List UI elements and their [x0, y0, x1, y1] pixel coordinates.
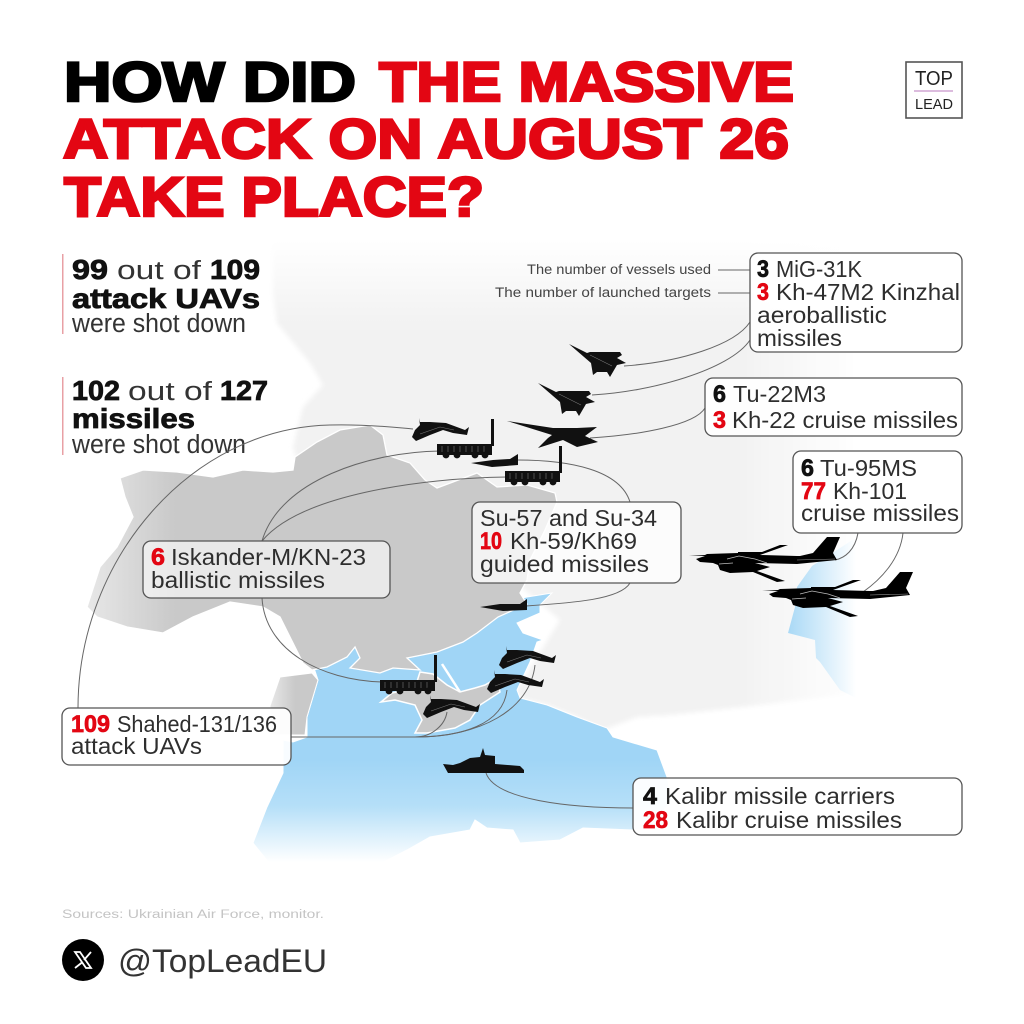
callout: MiG-31K: 3 [757, 279, 769, 306]
icon: Shahed drone north [412, 418, 469, 441]
callout: MiG-31K: missiles [757, 325, 842, 351]
icon: Su fighter north [471, 454, 518, 467]
logo: Top Lead: LEAD [915, 96, 953, 113]
icon: Tu-95MS bomber second [762, 572, 913, 617]
callout: Su-57 and Su-34: 10 [480, 528, 502, 555]
stat: attack UAVs shot down: were shot down [71, 310, 246, 338]
icon: Kalibr missile ship [443, 748, 524, 773]
legend labels: The number of vessels used [527, 262, 711, 277]
callout: Tu-22M3: Tu-22M3 [733, 381, 826, 407]
icon: X logo [62, 939, 104, 981]
map background [87, 236, 900, 864]
Crimea [381, 672, 500, 733]
icon: Iskander launcher Crimea [380, 655, 437, 694]
stat: missiles shot down: 127 [220, 375, 268, 406]
icon: MiG-31K aircraft second [538, 383, 595, 416]
callout: Tu-95MS: Tu-95MS [820, 455, 917, 481]
callout: Kalibr: Kalibr missile carriers [665, 783, 895, 809]
callout: Su-57 and Su-34: Kh-59/Kh69 [510, 528, 637, 554]
top fade [260, 236, 900, 326]
callout: Shahed-131/136 [62, 708, 291, 765]
icon: Shahed drone Crimea [423, 695, 480, 718]
callout: MiG-31K: aeroballistic [757, 302, 887, 328]
callout: Kalibr: 4 [643, 783, 658, 810]
icon: Shahed drone Kerch [487, 670, 544, 693]
callout: Shahed-131/136: Shahed-131/136 [117, 711, 277, 737]
stat: missiles shot down: were shot down [71, 431, 246, 459]
callout: Su-57 and Su-34 [472, 502, 681, 583]
callout: MiG-31K: Kh-47M2 Kinzhal [776, 279, 960, 305]
social handle: @TopLeadEU [118, 943, 327, 979]
stat: attack UAVs shot down: out of [117, 257, 202, 285]
icon: Iskander launcher east [505, 446, 562, 485]
stat: missiles shot down: missiles [72, 403, 195, 434]
stat: attack UAVs shot down [62, 254, 260, 338]
stat: attack UAVs shot down: 99 [72, 254, 108, 285]
callout: Kalibr: Kalibr cruise missiles [676, 807, 902, 833]
stat: attack UAVs shot down: 109 [210, 254, 260, 285]
callout: Shahed-131/136: attack UAVs [71, 733, 202, 759]
icon: Shahed drone Azov [499, 646, 556, 669]
callout: Su-57 and Su-34: Su-57 and Su-34 [480, 505, 657, 531]
callout: Tu-22M3: 3 [713, 407, 726, 434]
callout: Shahed-131/136: 109 [71, 711, 110, 738]
Romania coast land [270, 673, 318, 735]
callout: Iskander-M/KN-23 [143, 541, 390, 598]
callout: Tu-22M3: 6 [713, 381, 726, 408]
callout: Iskander-M/KN-23: ballistic missiles [151, 567, 325, 593]
callout: Kalibr: 28 [643, 807, 668, 834]
icon: MiG-31K aircraft [569, 344, 626, 377]
Arabat Spit [442, 664, 460, 692]
legend labels [495, 262, 711, 300]
Ukraine [87, 425, 557, 673]
connector curves [78, 270, 903, 808]
callout: MiG-31K: 3 [757, 256, 769, 283]
legend labels: The number of launched targets [495, 285, 711, 300]
icon: Su fighter south [480, 599, 527, 611]
callout: Tu-95MS: cruise missiles [801, 500, 959, 526]
sources note: Sources: Ukrainian Air Force, monitor. [62, 909, 324, 921]
title: ATTACK ON AUGUST 26 [63, 107, 789, 170]
callout: Tu-95MS [793, 451, 962, 533]
land: surrounding territory [273, 240, 880, 730]
stat: missiles shot down: 102 [72, 375, 120, 406]
title: THE MASSIVE [379, 50, 794, 113]
Black Sea and Sea of Azov [253, 593, 672, 864]
title: TAKE PLACE? [64, 165, 484, 228]
Caspian Sea [788, 535, 860, 700]
callout: Kalibr [633, 778, 962, 835]
stat: missiles shot down: out of [128, 378, 213, 406]
callout: Su-57 and Su-34: guided missiles [480, 551, 649, 577]
stat: missiles shot down [62, 375, 268, 459]
callout: Tu-22M3 [705, 378, 962, 436]
stat: attack UAVs shot down: attack UAVs [72, 283, 260, 314]
title [63, 50, 794, 228]
callout: Iskander-M/KN-23: Iskander-M/KN-23 [171, 544, 366, 570]
logo: Top Lead: TOP [915, 68, 953, 90]
logo: Top Lead [906, 62, 962, 118]
callout: MiG-31K: MiG-31K [776, 256, 862, 282]
icon: Iskander launcher north [437, 419, 494, 458]
callout: Tu-95MS: 6 [801, 455, 814, 482]
icon: Tu-95MS bomber [689, 537, 840, 582]
callout: Tu-95MS: Kh-101 [833, 478, 907, 504]
callout: Tu-22M3: Kh-22 cruise missiles [732, 407, 958, 433]
callout: Tu-95MS: 77 [801, 478, 826, 505]
title: HOW DID [64, 50, 356, 113]
callout: MiG-31K [750, 253, 962, 352]
icon: Tu-22M3 bomber [507, 421, 598, 448]
callout: Iskander-M/KN-23: 6 [151, 544, 165, 571]
